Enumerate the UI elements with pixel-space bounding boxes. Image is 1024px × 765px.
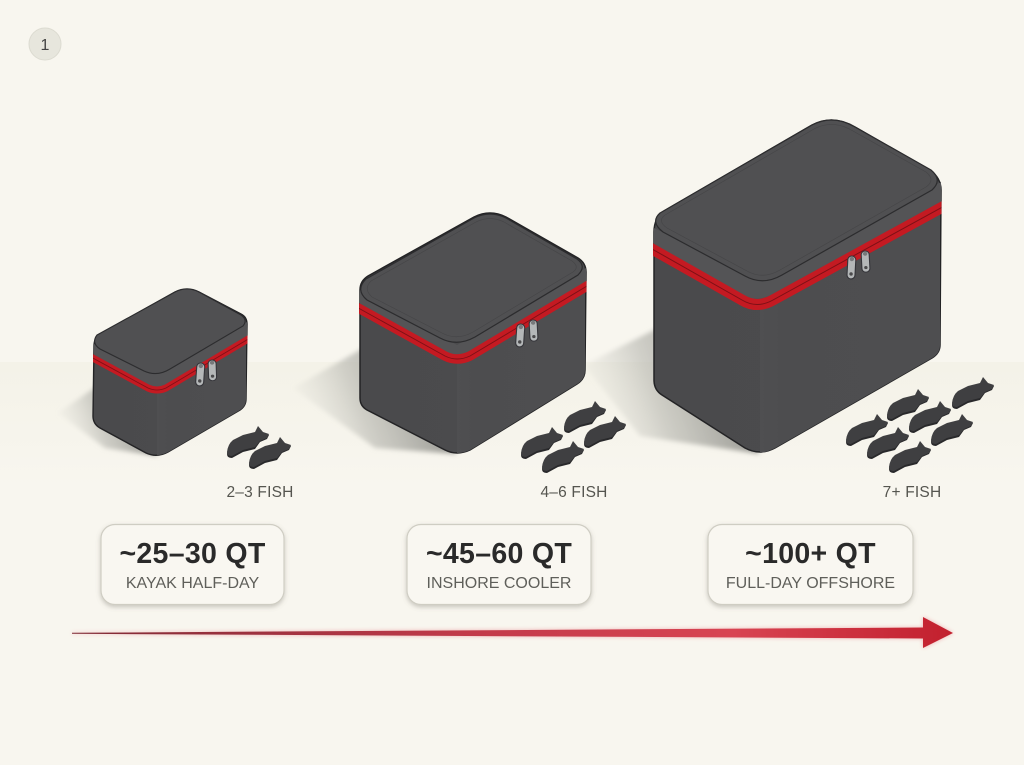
zipper pulls [847, 251, 870, 279]
cooler body [360, 213, 586, 453]
right face [157, 342, 246, 455]
lid band [360, 268, 586, 355]
cooler body [93, 289, 247, 455]
cooler: small [90, 289, 250, 455]
red zipper [90, 338, 250, 390]
cooler: large [645, 120, 948, 453]
fish count label: 4-6: 4–6 FISH [540, 484, 608, 501]
lid stitching [661, 124, 931, 275]
capacity card: full-day offshore [708, 524, 913, 604]
fish count label: 2-3: 2–3 FISH [226, 484, 294, 501]
capacity card: full-day offshore: ~100+ QT [745, 538, 876, 570]
lid band [94, 322, 247, 388]
zipper pulls [195, 360, 217, 386]
step number badge [29, 28, 61, 60]
capacity card: full-day offshore: FULL-DAY OFFSHORE [726, 575, 895, 592]
capacity card: kayak half-day: KAYAK HALF-DAY [126, 575, 260, 592]
red zipper [352, 283, 592, 359]
red zipper [645, 204, 948, 304]
lid top [95, 289, 245, 374]
lid band [654, 182, 941, 299]
capacity card: kayak half-day [101, 524, 284, 604]
capacity card: inshore cooler [407, 524, 591, 604]
right face [457, 288, 585, 453]
right face [760, 208, 940, 453]
lid top [361, 214, 582, 342]
zipper pulls [515, 320, 538, 347]
shadow: small cooler [58, 384, 158, 456]
step number badge: 1 [41, 37, 50, 54]
fish group: 7+ fish [846, 377, 994, 473]
capacity card: inshore cooler: ~45–60 QT [426, 538, 572, 570]
shadow: large cooler [584, 327, 760, 454]
cooler: medium [352, 213, 592, 453]
fish group: 4-6 fish [521, 401, 626, 473]
fish group: 2-3 fish [227, 426, 291, 469]
growth arrow [72, 617, 953, 648]
capacity card: inshore cooler: INSHORE COOLER [427, 575, 571, 592]
lid stitching [367, 218, 576, 337]
lid top [656, 120, 937, 281]
shadow: medium cooler [293, 347, 457, 454]
cooler body [654, 120, 941, 452]
capacity card: kayak half-day: ~25–30 QT [119, 538, 266, 570]
floor band [0, 362, 1024, 487]
fish count label: 7+: 7+ FISH [883, 484, 941, 501]
